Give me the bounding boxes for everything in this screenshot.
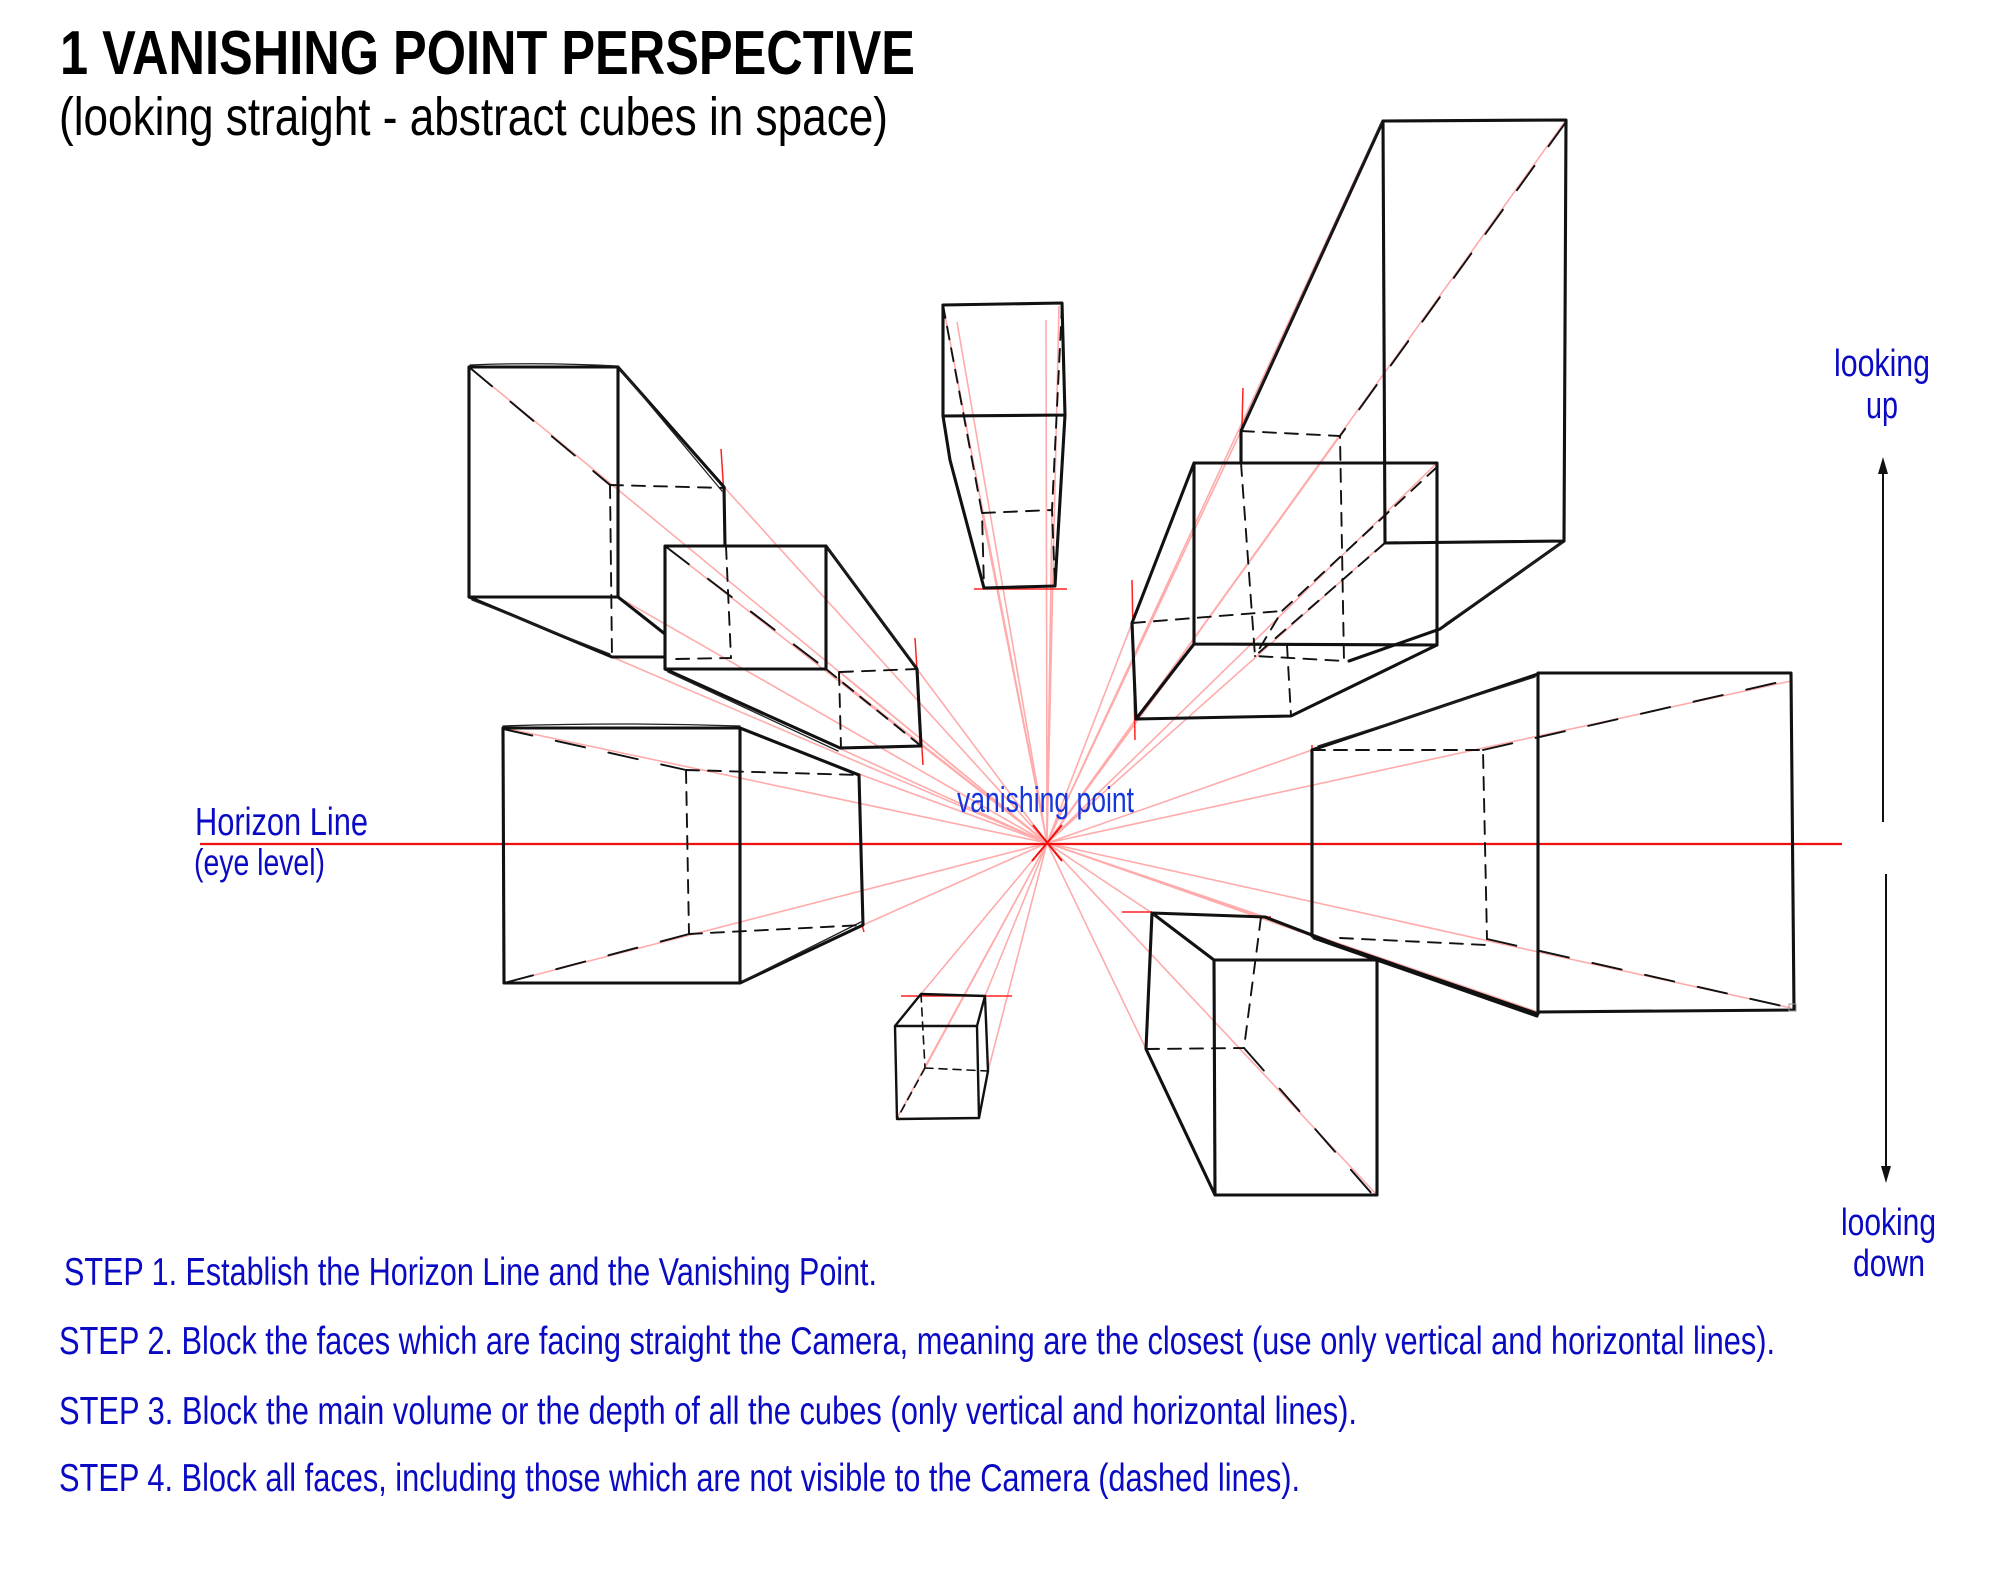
cube: tall upper right xyxy=(1241,120,1566,661)
subtitle: (looking straight - abstract cubes in space) xyxy=(59,87,888,147)
cube: top centre xyxy=(943,303,1067,589)
title: 1 VANISHING POINT PERSPECTIVE xyxy=(60,19,915,88)
label: looking up: up xyxy=(1866,385,1898,427)
cube: large right xyxy=(1312,673,1796,1016)
cube: lower right xyxy=(1122,912,1377,1195)
construction rays to vanishing point xyxy=(469,120,1791,1195)
label: horizon line xyxy=(194,801,368,883)
step list xyxy=(59,1251,1775,1500)
horizon line xyxy=(200,843,1842,845)
label: looking down: down xyxy=(1853,1243,1925,1285)
label: looking up xyxy=(1834,343,1930,427)
label: horizon line: (eye level) xyxy=(194,842,325,883)
cube: front centre right xyxy=(1132,463,1437,740)
vanishing point cross xyxy=(1032,825,1062,861)
cube: overlapping lower left xyxy=(665,546,923,765)
arrow: up xyxy=(1878,457,1888,822)
cube: upper left xyxy=(469,364,731,659)
label: looking down xyxy=(1841,1202,1936,1285)
cube: small bottom centre xyxy=(895,994,1012,1119)
label: looking down: looking xyxy=(1841,1202,1936,1244)
arrow: down xyxy=(1881,874,1891,1183)
label: horizon line: Horizon Line xyxy=(195,801,368,844)
cube: left on the horizon xyxy=(503,724,864,983)
label: vanishing point: vanishing point xyxy=(957,779,1134,820)
label: looking up: looking xyxy=(1834,343,1930,385)
step list: STEP 1. Establish the Horizon Line and the Vanishing Point. xyxy=(64,1251,877,1294)
step list: STEP 3. Block the main volume or the depth of all the cubes (only vertical and horizontal lines). xyxy=(59,1390,1357,1433)
step list: STEP 4. Block all faces, including those which are not visible to the Camera (dashed lines). xyxy=(59,1457,1300,1500)
